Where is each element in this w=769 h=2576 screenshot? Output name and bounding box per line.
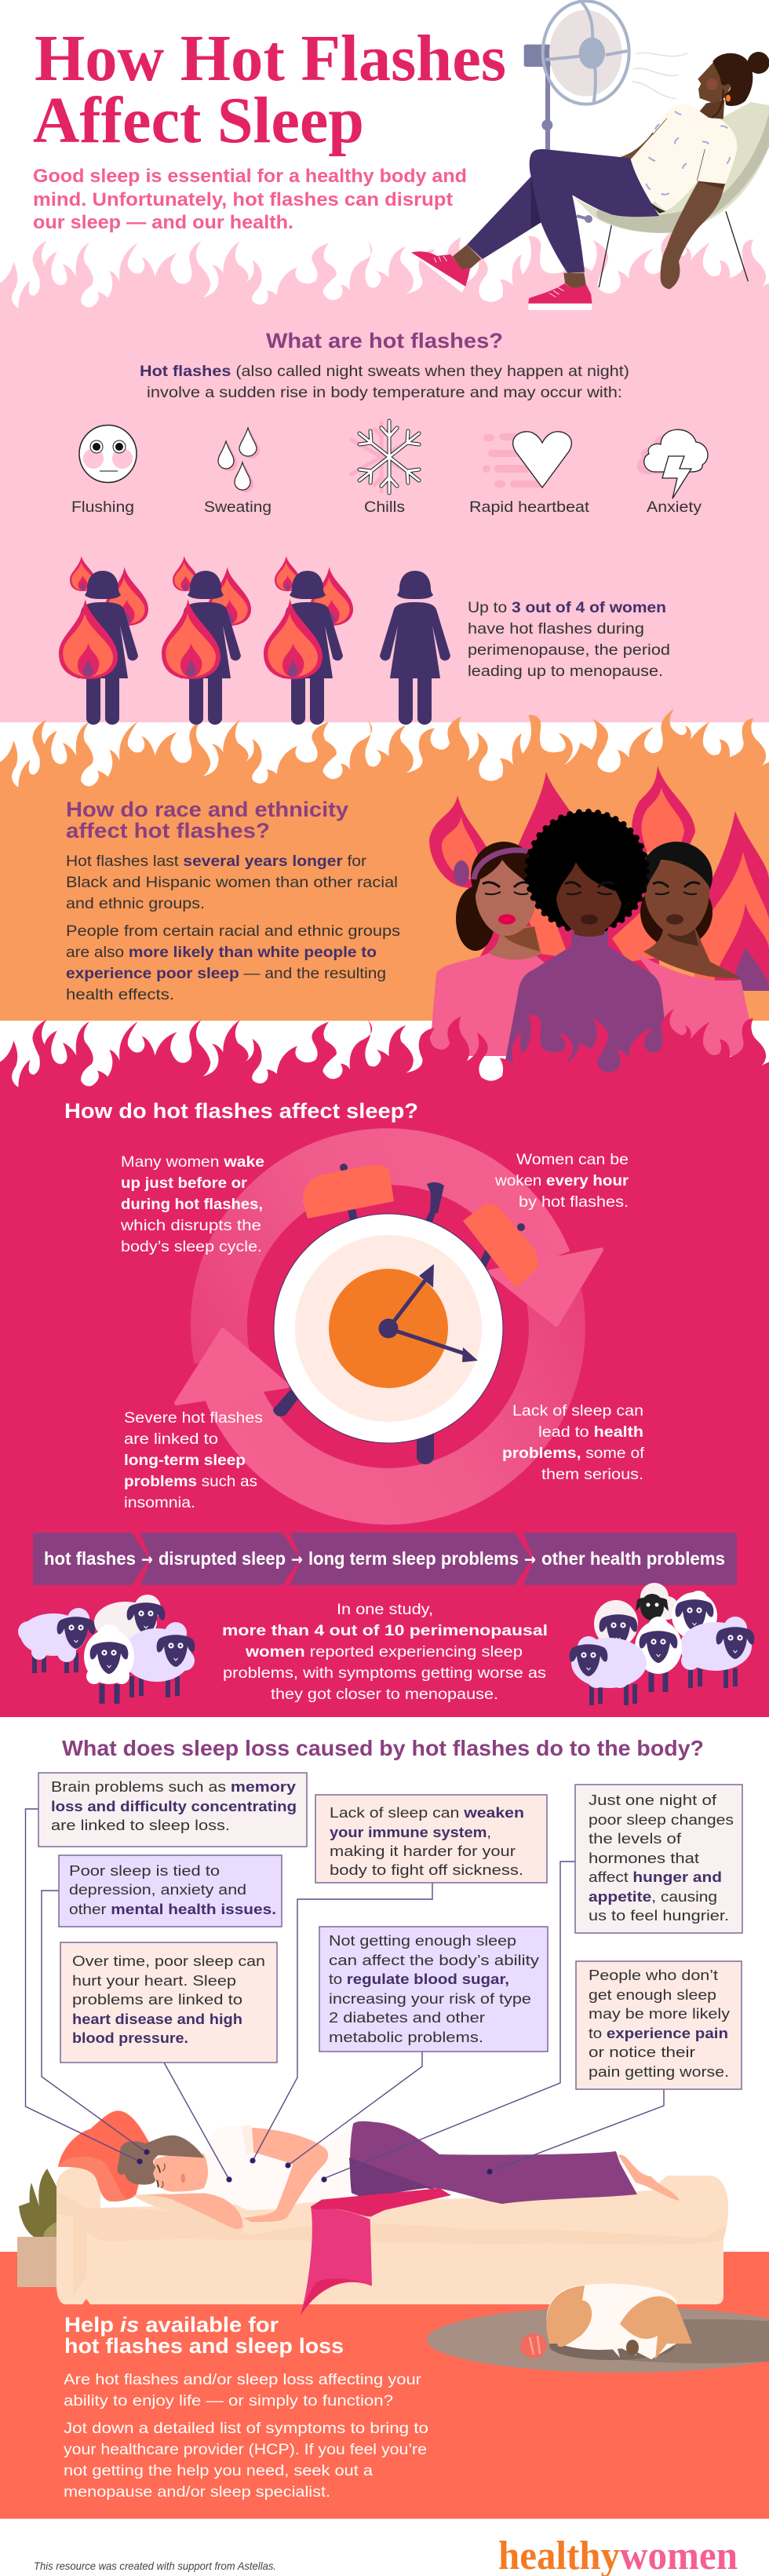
symptom labels: Rapid heartbeat xyxy=(469,499,590,516)
text: wake up before hot flashes xyxy=(120,1153,264,1255)
heading and text: race and ethnicity: How do race and ethnicity xyxy=(66,798,348,821)
statistic text: perimenopause, the period xyxy=(468,641,670,659)
callout box: mental health: Poor sleep is tied to xyxy=(69,1862,220,1879)
callout box: hunger: affect hunger and xyxy=(589,1869,722,1885)
callout box: blood sugar: can affect the body’s ability xyxy=(329,1952,540,1968)
callout box: heart: hurt your heart. Sleep xyxy=(72,1972,236,1989)
callout box: hunger: appetite , causing xyxy=(589,1888,717,1905)
blanket xyxy=(322,2188,451,2216)
text: long-term sleep problems: problems such as xyxy=(124,1473,257,1490)
callout box: pain: get enough sleep xyxy=(589,1986,716,2003)
callout box: hunger: us to feel hungrier. xyxy=(589,1907,729,1924)
intro text: mind. Unfortunately, hot flashes can disrupt xyxy=(33,189,453,210)
heading and text: help is available: menopause and/or sleep specialist. xyxy=(64,2483,330,2501)
title xyxy=(33,22,506,157)
trousers xyxy=(350,2121,637,2204)
heading and text: help is available: your healthcare provider (HCP). If you feel you’re xyxy=(64,2441,427,2458)
icon: chills xyxy=(350,421,419,493)
text: wake up before hot flashes: body’s sleep cycle. xyxy=(121,1238,262,1255)
panel: pink background xyxy=(0,314,769,722)
callout box: immune system: making it harder for your xyxy=(330,1843,516,1859)
text: wake up before hot flashes: during hot flashes, xyxy=(121,1196,263,1213)
icon: rapid heartbeat xyxy=(483,432,571,488)
connector dots on body xyxy=(137,2149,493,2183)
callout box: mental health xyxy=(59,1855,282,1927)
icon: sweating xyxy=(218,428,260,492)
heading and text: race and ethnicity: experience poor sleep — and the resulting xyxy=(66,965,386,982)
intro text xyxy=(33,166,467,233)
woman on the right xyxy=(636,842,757,1056)
callout box: blood sugar: to regulate blood sugar, xyxy=(329,1971,509,1987)
callout box: immune system: Lack of sleep can weaken xyxy=(330,1804,524,1821)
callout box: heart: heart disease and high xyxy=(72,2011,242,2027)
chevron process chain: disrupted sleep xyxy=(159,1548,286,1569)
callout box: blood sugar: metabolic problems. xyxy=(329,2029,483,2045)
text: health problems: lead to health xyxy=(538,1423,643,1441)
text: study statistic xyxy=(222,1601,548,1703)
illustration: woman sitting in a chair xyxy=(411,52,769,310)
heading and text: help is available: Jot down a detailed list of symptoms to bring to xyxy=(64,2420,428,2437)
chevron process chain: long term sleep problems xyxy=(308,1548,519,1569)
heading: what are hot flashes: Hot flashes (also called night sweats when they happen at night) xyxy=(140,363,629,380)
heading and text: help is available: hot flashes and sleep loss xyxy=(64,2334,344,2358)
flame border: orange to crimson xyxy=(0,1009,769,1097)
callout box: mental health: other mental health issues. xyxy=(69,1901,276,1917)
callout box: pain: may be more likely xyxy=(589,2005,731,2022)
callout box: brain xyxy=(38,1773,307,1847)
intro text: Good sleep is essential for a healthy body and xyxy=(33,166,467,187)
illustration: sofa xyxy=(56,2167,728,2304)
intro text: our sleep — and our health. xyxy=(33,212,293,233)
text: long-term sleep problems: insomnia. xyxy=(124,1494,195,1511)
text: wake up before hot flashes: up just before or xyxy=(121,1175,247,1192)
panel: orange background xyxy=(0,793,769,1021)
coral lower panel xyxy=(0,2252,769,2519)
woman in the middle xyxy=(505,812,669,1087)
symptom labels: Anxiety xyxy=(647,499,702,516)
callout box: blood sugar: increasing your risk of type xyxy=(329,1990,531,2007)
heading: what are hot flashes: involve a sudden rise in body temperature and may occur with: xyxy=(147,384,622,401)
callout box: hunger: poor sleep changes xyxy=(589,1811,734,1828)
sheep group: left xyxy=(18,1595,195,1704)
statistic text: leading up to menopause. xyxy=(468,663,663,680)
symptom labels xyxy=(71,499,702,516)
body and head xyxy=(118,2125,363,2229)
chevron process chain: other health problems xyxy=(541,1548,725,1569)
symptom labels: Flushing xyxy=(71,499,134,516)
chevron process chain: hot flashes xyxy=(44,1548,136,1569)
text: woken every hour: Women can be xyxy=(516,1151,629,1168)
text: long-term sleep problems: Severe hot flashes xyxy=(124,1409,263,1427)
callout box: immune system: body to fight off sickness. xyxy=(330,1862,523,1878)
logo: healthywomen xyxy=(498,2534,738,2576)
heading: what are hot flashes: What are hot flashes? xyxy=(266,329,503,353)
text: woken every hour: by hot flashes. xyxy=(519,1193,629,1211)
callout box: blood sugar: 2 diabetes and other xyxy=(329,2009,485,2026)
callout box: brain: Brain problems such as memory xyxy=(51,1778,297,1795)
callout box: heart: Over time, poor sleep can xyxy=(72,1953,265,1969)
panel: white body section background xyxy=(0,1717,769,2252)
callout box: brain: are linked to sleep loss. xyxy=(51,1817,230,1833)
chevron process chain: → xyxy=(291,1550,303,1569)
heading and text: help is available xyxy=(64,2313,428,2501)
text: health problems: Lack of sleep can xyxy=(512,1402,643,1420)
text: long-term sleep problems: are linked to xyxy=(124,1431,218,1448)
heading: what are hot flashes xyxy=(140,329,629,401)
pictogram: 3 of 4 women with flames xyxy=(59,556,450,725)
callout box: pain: to experience pain xyxy=(589,2025,728,2041)
title: How Hot Flashes xyxy=(35,22,506,95)
title: Affect Sleep xyxy=(33,84,364,157)
callout box: pain: pain getting worse. xyxy=(589,2063,729,2080)
symptom labels: Chills xyxy=(364,499,405,516)
text: study statistic: they got closer to menopause. xyxy=(271,1686,498,1703)
heading and text: race and ethnicity: and ethnic groups. xyxy=(66,895,205,912)
text: study statistic: In one study, xyxy=(337,1601,433,1618)
alarm clock xyxy=(273,1164,538,1464)
text: woken every hour xyxy=(494,1151,629,1211)
statistic text: Up to 3 out of 4 of women xyxy=(468,599,666,616)
heading and text: race and ethnicity: are also more likely than white people to xyxy=(66,944,377,961)
heading and text: race and ethnicity: Hot flashes last several years longer for xyxy=(66,853,367,870)
connector lines from body to callouts xyxy=(25,1809,664,2180)
text: woken every hour: woken every hour xyxy=(494,1172,629,1189)
heading and text: help is available: Are hot flashes and/or sleep loss affecting your xyxy=(64,2371,422,2388)
illustration: rug, dog and ball xyxy=(427,2284,769,2373)
heading and text: race and ethnicity xyxy=(66,798,400,1003)
callout box: blood sugar: Not getting enough sleep xyxy=(329,1932,516,1949)
circular cycle arrows xyxy=(177,1156,601,1496)
text: wake up before hot flashes: which disrupts the xyxy=(120,1217,261,1234)
heading and text: help is available: not getting the help you need, seek out a xyxy=(64,2462,373,2479)
callout box: hunger: the levels of xyxy=(589,1830,682,1847)
illustration: fan xyxy=(524,1,687,152)
footer credit: This resource was created with support from Astellas. xyxy=(34,2560,276,2572)
panel: crimson background xyxy=(0,1091,769,1717)
text: study statistic: problems, with symptoms getting worse as xyxy=(223,1664,546,1682)
callout box: immune system xyxy=(315,1795,547,1883)
text: health problems: problems, some of xyxy=(502,1445,645,1462)
callout box: hunger xyxy=(575,1785,742,1933)
flame border: white to pink xyxy=(0,230,769,318)
text: study statistic: women reported experiencing sleep xyxy=(245,1643,523,1661)
callout box: pain xyxy=(576,1961,742,2089)
heading and text: help is available: Help is available for xyxy=(64,2313,279,2337)
text: health problems xyxy=(502,1402,645,1483)
statistic text: have hot flashes during xyxy=(468,620,644,638)
sheep group: right xyxy=(570,1583,754,1705)
text: long-term sleep problems xyxy=(124,1409,263,1511)
icon: anxiety cloud xyxy=(637,429,708,499)
text: long-term sleep problems: long-term sleep xyxy=(124,1452,246,1469)
heading: sleep loss effects: What does sleep loss caused by hot flashes do to the body? xyxy=(62,1736,704,1760)
foot xyxy=(618,2154,680,2201)
text: health problems: them serious. xyxy=(541,1466,643,1483)
callout box: brain: loss and difficulty concentrating xyxy=(51,1798,297,1814)
callout box: pain: People who don’t xyxy=(589,1967,718,1983)
heading and text: race and ethnicity: People from certain racial and ethnic groups xyxy=(66,923,400,940)
chevron process chain: → xyxy=(141,1550,153,1569)
text: study statistic: more than 4 out of 10 perimenopausal xyxy=(222,1622,548,1639)
illustration: three women with flames xyxy=(429,765,769,1087)
callout box: heart xyxy=(60,1942,277,2063)
icon: flushing xyxy=(79,426,137,482)
callout box: mental health: depression, anxiety and xyxy=(69,1881,246,1898)
statistic text xyxy=(468,599,670,680)
chevron process chain xyxy=(33,1533,737,1585)
chevron process chain: → xyxy=(524,1550,536,1569)
callout box: hunger: hormones that xyxy=(589,1850,699,1866)
heading: how do hot flashes affect sleep: How do hot flashes affect sleep? xyxy=(64,1099,418,1123)
illustration: woman lying on the sofa xyxy=(58,2110,680,2315)
callout box: hunger: Just one night of xyxy=(589,1792,717,1808)
flame border: pink to orange xyxy=(0,709,769,797)
woman on the left xyxy=(429,842,553,1056)
pillow xyxy=(58,2110,246,2236)
heading and text: race and ethnicity: health effects. xyxy=(66,986,174,1003)
heading and text: race and ethnicity: affect hot flashes? xyxy=(66,819,270,842)
callout box: pain: or notice their xyxy=(589,2044,695,2060)
background: white top area xyxy=(0,0,769,236)
illustration: plant xyxy=(17,2169,56,2287)
callout box: heart: problems are linked to xyxy=(72,1991,242,2008)
heading and text: race and ethnicity: Black and Hispanic women than other racial xyxy=(66,874,398,891)
callout box: heart: blood pressure. xyxy=(72,2030,188,2046)
callout box: immune system: your immune system , xyxy=(330,1824,491,1840)
heading and text: help is available: ability to enjoy life — or simply to function? xyxy=(64,2392,393,2410)
symptom labels: Sweating xyxy=(204,499,272,516)
callout box: blood sugar xyxy=(319,1927,548,2052)
text: wake up before hot flashes: Many women wake xyxy=(121,1153,264,1171)
